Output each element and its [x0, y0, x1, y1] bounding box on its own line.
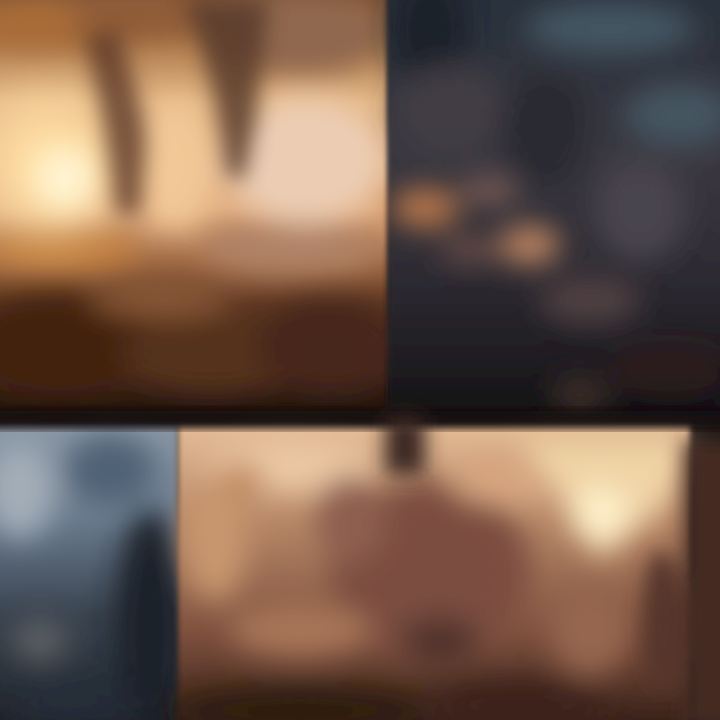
dark seam smudge [385, 415, 425, 475]
panel: blue-grey storm [0, 425, 185, 720]
bright glow [520, 440, 690, 560]
dark treeline [0, 284, 400, 395]
panel: peach haze [170, 425, 690, 720]
icon: glowing sun [0, 97, 120, 233]
dark horizontal seam [0, 411, 720, 427]
glowing orange cloud patches [391, 176, 560, 265]
smoke column right [185, 0, 268, 180]
panel: dark storm clouds [388, 0, 720, 420]
right edge dark figure [642, 440, 720, 720]
smoke column left [84, 30, 146, 215]
panel: sunset sky with smoke columns [0, 0, 400, 420]
